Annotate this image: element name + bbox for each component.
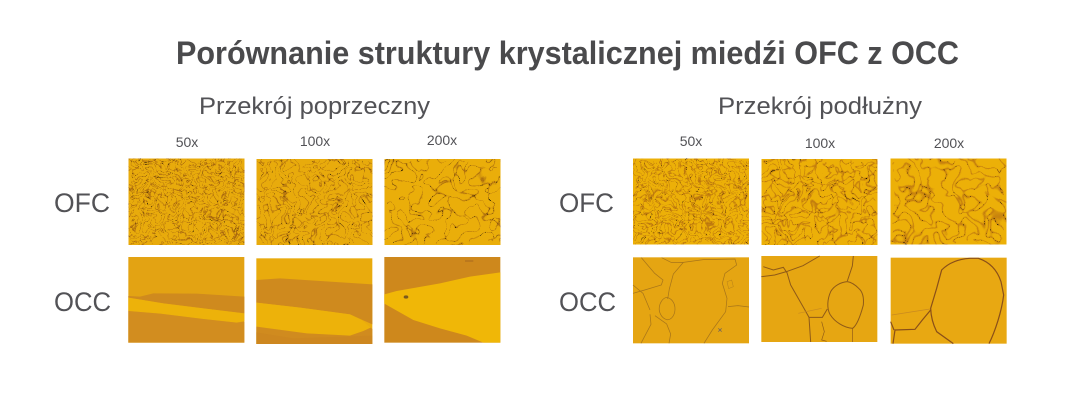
micrograph: cross section OCC 200x — [384, 257, 500, 343]
micrograph: longitudinal OCC 100x — [761, 256, 877, 342]
micrograph: cross section OFC 200x — [384, 159, 500, 245]
row labels: longitudinal section: OCC — [559, 287, 616, 317]
micrograph: longitudinal OFC 200x — [890, 158, 1006, 244]
title: Porównanie struktury krystalicznej miedźi OFC z OCC — [176, 35, 959, 71]
magnification labels: cross section: 200x — [427, 132, 457, 148]
row labels: cross section: OCC — [54, 287, 111, 317]
magnification labels: cross section: 50x — [176, 134, 198, 150]
magnification labels: longitudinal section — [680, 133, 964, 151]
magnification labels: longitudinal section: 50x — [680, 133, 702, 149]
magnification labels: longitudinal section: 200x — [934, 135, 964, 151]
micrograph: longitudinal OFC 50x — [633, 158, 749, 244]
row labels: cross section: OFC — [54, 188, 110, 218]
micrograph: cross section OFC 50x — [128, 158, 244, 245]
magnification labels: longitudinal section: 100x — [805, 135, 835, 151]
heading: longitudinal section: Przekrój podłużny — [718, 93, 922, 120]
row labels: longitudinal section — [559, 188, 616, 317]
magnification labels: cross section — [176, 132, 457, 150]
micrograph: cross section OCC 50x — [128, 257, 244, 343]
micrograph: longitudinal OCC 50x — [633, 257, 749, 343]
row labels: longitudinal section: OFC — [559, 188, 614, 218]
heading: cross section: Przekrój poprzeczny — [199, 93, 430, 120]
micrograph: cross section OFC 100x — [256, 159, 372, 245]
row labels: cross section — [54, 188, 111, 317]
micrograph: longitudinal OFC 100x — [762, 159, 878, 245]
micrograph: cross section OCC 100x — [256, 258, 372, 344]
micrograph: longitudinal OCC 200x — [891, 258, 1007, 344]
magnification labels: cross section: 100x — [300, 133, 330, 149]
